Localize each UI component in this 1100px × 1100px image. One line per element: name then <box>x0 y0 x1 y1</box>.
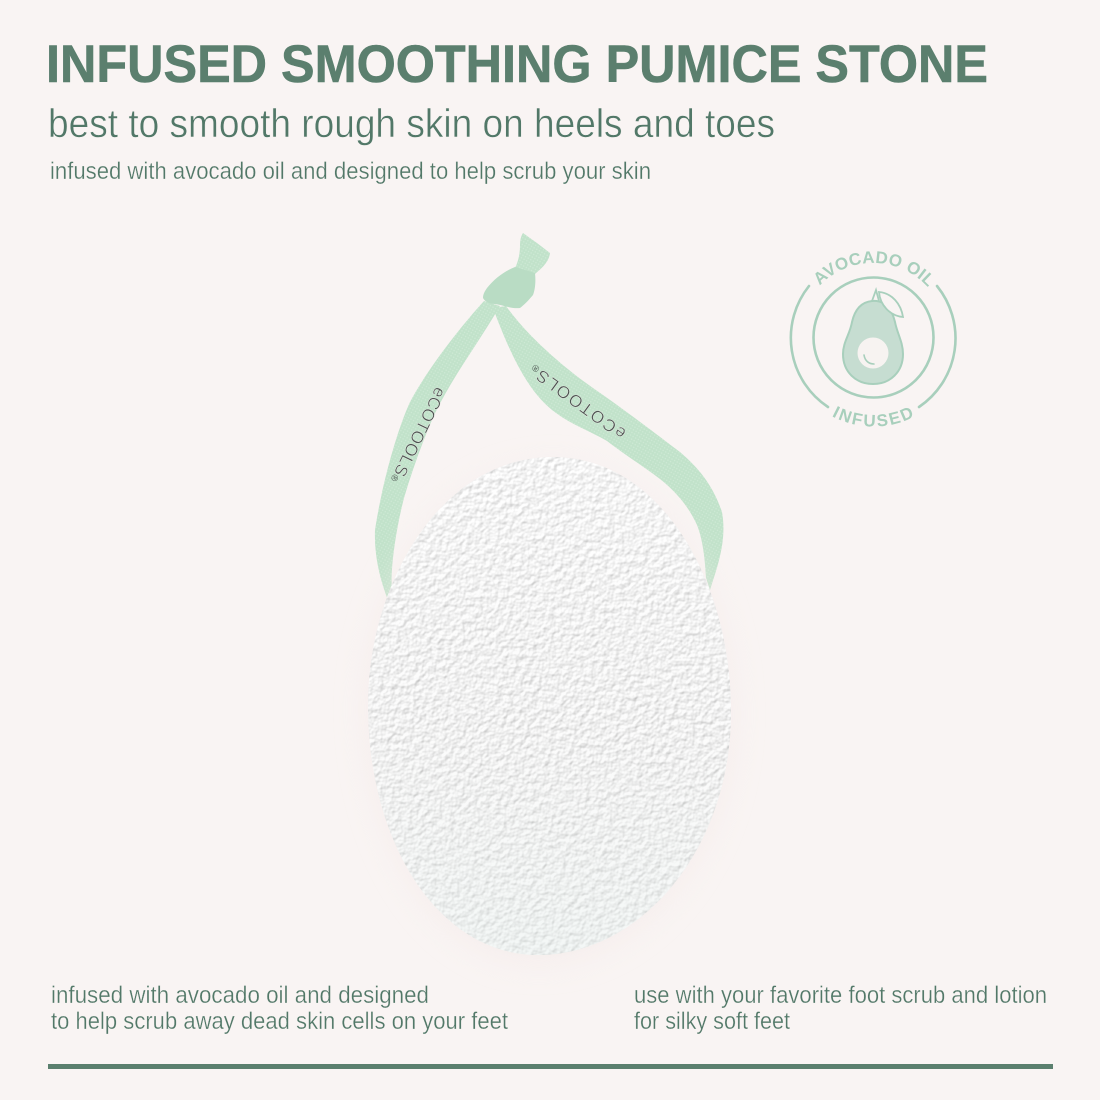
icon: avocado <box>843 290 903 384</box>
ribbon: right strap <box>493 306 723 590</box>
caption: right: for silky soft feet <box>634 1008 790 1035</box>
stone shadow <box>364 465 735 965</box>
badge: outer ring <box>791 286 956 407</box>
stone <box>360 450 740 960</box>
badge text: infused: INFUSED <box>832 406 912 427</box>
badge text: avocado oil: AVOCADO OIL <box>815 251 932 287</box>
ribbon text: left: eCOTOOLS® <box>387 384 449 486</box>
stone texture <box>360 450 740 960</box>
caption: left <box>51 982 508 1035</box>
intro text: infused with avocado oil and designed to help scrub your skin <box>50 158 651 185</box>
product: pumice stone with ribbon <box>360 233 740 965</box>
ribbon: left strap <box>375 301 500 600</box>
subtitle: best to smooth rough skin on heels and toes <box>48 102 775 146</box>
ribbon: knot and tail <box>483 233 550 308</box>
caption: left: infused with avocado oil and designed <box>51 982 429 1009</box>
badge: inner ring <box>814 278 934 398</box>
footer rule <box>48 1064 1053 1069</box>
caption: left: to help scrub away dead skin cells on your feet <box>51 1008 508 1035</box>
ribbon text: right: eCOTOOLS® <box>526 361 629 443</box>
caption: right <box>634 982 1047 1035</box>
caption: right: use with your favorite foot scrub and lotion <box>634 982 1047 1009</box>
badge: avocado oil infused <box>790 251 957 427</box>
title: INFUSED SMOOTHING PUMICE STONE <box>46 35 988 94</box>
